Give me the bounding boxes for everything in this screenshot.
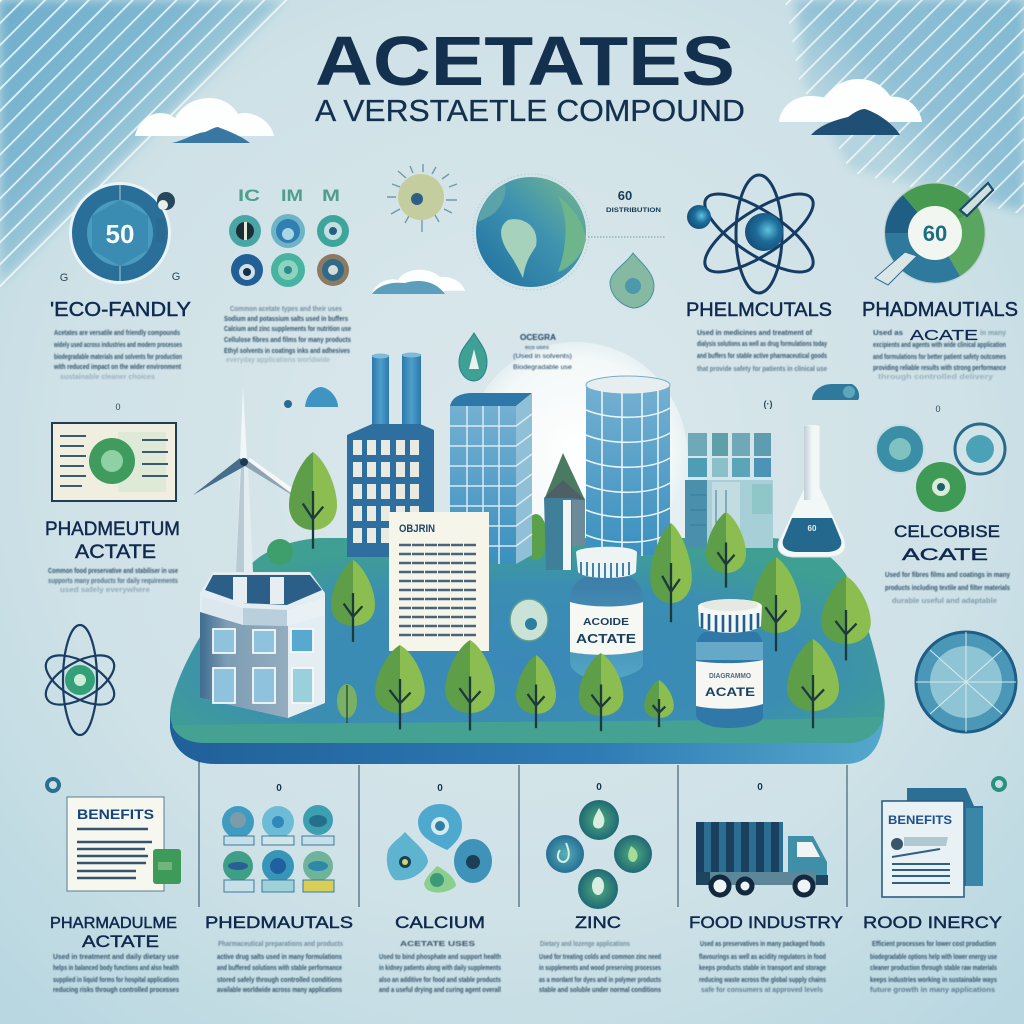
heading: phadmeutum acetate xyxy=(45,519,180,563)
icon: calcium cluster xyxy=(387,804,492,892)
icon: atom xyxy=(687,175,824,293)
small column markers: 0 xyxy=(276,783,282,794)
icon grid heading xyxy=(238,186,340,205)
text block: eco-friendly: widely used across industries and modern processes xyxy=(53,340,182,349)
text block: centre note: Biodegradable use xyxy=(513,364,572,371)
text block: food industry: Used as preservatives in many packaged foods xyxy=(700,939,825,948)
text block: calcium xyxy=(379,939,501,994)
text block: phadmeutum xyxy=(48,566,178,594)
text block: icon grid: Ethyl solvents in coatings inks and adhesives xyxy=(224,346,350,355)
icon: water drop centre xyxy=(459,333,487,381)
small glyphs beside gauge: G xyxy=(172,271,180,283)
text block: icon grid xyxy=(224,304,351,364)
text block: phadmautials: through controlled delivery xyxy=(878,372,994,381)
heading: cellulose acetate: ACATE xyxy=(902,545,988,564)
text block: centre note: eco uses xyxy=(525,345,550,351)
text block: phedmautals: available worldwide across many applications xyxy=(217,985,342,994)
icon grid heading: IM xyxy=(281,186,303,205)
icon: lab flask xyxy=(778,424,845,557)
platform xyxy=(170,538,885,764)
corner stripes top left xyxy=(0,0,292,296)
heading: phelmcutals: PHELMCUTALS xyxy=(686,300,832,321)
text block: zinc: Used for treating colds and common zinc need xyxy=(539,952,661,961)
document sheet: OBJRIN xyxy=(399,523,435,535)
heading: calcium: CALCIUM xyxy=(395,913,485,932)
text block: cellulose: durable useful and adaptable xyxy=(892,596,997,605)
small column markers: 0 xyxy=(437,783,443,794)
title: ACETATES xyxy=(315,22,735,100)
text block: phedmautals xyxy=(217,939,343,994)
icon: report with folder: BENEFITS xyxy=(888,813,952,827)
heading: zinc: ZINC xyxy=(575,913,621,932)
background tile wall xyxy=(685,433,773,548)
icon: sun xyxy=(387,164,457,232)
icon: eco gauge 50: 50 xyxy=(106,219,134,249)
text block: icon grid: Sodium and potassium salts used in buffers xyxy=(224,314,348,323)
text block: calcium: Used to bind phosphate and support health xyxy=(379,952,501,961)
icon: cloud right xyxy=(779,79,922,135)
panel: benefits document xyxy=(67,797,181,891)
heading: cellulose acetate xyxy=(894,522,1000,564)
icon: globe xyxy=(473,174,589,290)
text block: cellulose xyxy=(885,570,1011,605)
bottle: acetate large: ACOIDE xyxy=(583,617,629,628)
chimneys xyxy=(372,352,421,433)
text block: zinc: Dietary and lozenge applications xyxy=(540,939,630,948)
text block: eco-friendly: Acetates are versatile and friendly compounds xyxy=(54,328,180,337)
text block: pharmadulme: reducing risks through controlled processes xyxy=(53,985,179,994)
sub heading: ate: ACATE xyxy=(910,327,978,344)
icon: eco gauge 50 xyxy=(69,182,175,284)
text block: calcium: also an additive for food and stable products xyxy=(379,975,501,984)
text block: phedmautals: active drug salts used in many formulations xyxy=(217,952,342,961)
tree behind factory xyxy=(289,452,337,549)
icon: truck xyxy=(696,822,828,895)
icon: cloud left xyxy=(135,98,274,143)
small glyphs beside gauge: G xyxy=(60,272,68,284)
text block: calcium: in kidney patients along with daily supplements xyxy=(379,963,501,972)
round emblem xyxy=(510,599,548,641)
bottle: acetate small: ACATE xyxy=(705,685,755,699)
text block: eco-friendly: with reduced impact on the wider environment xyxy=(53,362,181,371)
trees front row xyxy=(375,639,839,731)
text block: food industry: reducing waste across the global supply chains xyxy=(699,975,826,984)
text block: zinc: as a mordant for dyes and in polymer products xyxy=(539,975,661,984)
heading: phadmeutum acetate: PHADMEUTUM xyxy=(45,519,180,540)
small column markers: 0 xyxy=(757,782,763,793)
icon: report with folder xyxy=(882,788,983,897)
small column markers: 0 xyxy=(596,782,602,793)
text block: centre note: (Used in solvents) xyxy=(513,353,572,360)
heading: phedmautals: PHEDMAUTALS xyxy=(205,913,353,932)
text block: phelmcutals xyxy=(697,328,828,373)
small gabled house xyxy=(544,453,585,570)
text block: zinc: stable and soluble under normal conditions xyxy=(539,985,661,994)
octagonal building xyxy=(200,572,325,718)
text block: phadmeutum: used safely everywhere xyxy=(60,585,150,594)
panel: phadmeutum card xyxy=(52,423,176,501)
bottle: acetate small: DIAGRAMMO xyxy=(709,673,752,680)
heading: rood inercy: ROOD INERCY xyxy=(863,913,1002,932)
icon grid heading: M xyxy=(322,186,340,205)
small floating icons: 0 xyxy=(935,404,941,414)
icon: wind turbine xyxy=(193,386,305,572)
heading: pharmadulme acetate: ACTATE xyxy=(82,932,159,951)
text block: phedmautals: and buffered solutions with stable performance xyxy=(217,963,342,972)
heading: pharmadulme acetate: PHARMADULME xyxy=(50,915,177,932)
small column markers xyxy=(45,776,1007,794)
heading: food industry: FOOD INDUSTRY xyxy=(689,913,843,932)
trees middle row xyxy=(331,512,871,660)
text block: phadmautials: Used as xyxy=(873,328,903,337)
text block: phelmcutals: Used in medicines and treatment of xyxy=(697,328,812,337)
text block: phelmcutals: that provide safety for patients in clinical use xyxy=(697,364,827,373)
text block: zinc: in supplements and wood preserving processes xyxy=(539,963,661,972)
text block: phadmeutum: supports many products for daily requirements xyxy=(48,576,178,585)
text block: food industry: keeps products stable in transport and storage xyxy=(699,963,826,972)
text block: pharmadulme xyxy=(53,952,179,994)
text: 60 stat: DISTRIBUTION xyxy=(606,208,661,214)
icon: zinc circles xyxy=(546,800,652,909)
small floating icons: 0 xyxy=(115,402,121,412)
text block: food industry: flavourings as well as acidity regulators in food xyxy=(699,952,826,961)
heading: pharmadulme acetate xyxy=(50,915,177,951)
icon: drop xyxy=(610,253,654,308)
text block: eco-friendly: biodegradable materials and solvents for production xyxy=(54,352,182,361)
icon: faint background trees xyxy=(267,514,547,723)
text block: calcium: ACETATE USES xyxy=(400,939,475,948)
icon grid heading: IC xyxy=(238,186,260,205)
bottle: acetate large xyxy=(570,547,643,680)
icon grid: six circles xyxy=(229,214,349,287)
text block: pharmadulme: supplied in liquid forms for hospital applications xyxy=(53,975,179,984)
text block: icon grid: everyday applications worldwide xyxy=(226,355,330,364)
text block: centre note: OCEGRA xyxy=(520,333,556,342)
text block: calcium: and a useful drying and curing agent overall xyxy=(379,985,501,994)
document sheet xyxy=(389,512,489,651)
text block: food industry: safe for consumers at approved levels xyxy=(701,985,823,994)
small floating icons: (·) xyxy=(764,399,772,409)
column dividers xyxy=(199,760,847,907)
text block: eco-friendly xyxy=(53,328,182,381)
text block: phedmautals: Pharmaceutical preparations and products xyxy=(218,939,343,948)
text block: food industry xyxy=(699,939,826,994)
text block: phadmeutum: Common food preservative and stabiliser in use xyxy=(48,566,178,575)
text block: phedmautals: stored safely through controlled conditions xyxy=(217,975,342,984)
heading: phadmeutum acetate: ACTATE xyxy=(75,542,156,563)
soft white glow behind towers xyxy=(470,342,688,560)
icon: three circles right xyxy=(876,424,1005,512)
text block: zinc xyxy=(539,939,661,994)
panel: benefits document: BENEFITS xyxy=(77,806,154,822)
icon grid: six bottles xyxy=(222,805,334,892)
icon: small cloud xyxy=(372,270,465,294)
icon: globe right xyxy=(916,632,1016,732)
corner stripes top right xyxy=(785,0,1024,215)
factory building xyxy=(347,424,434,557)
text: 60 stat xyxy=(606,188,661,214)
text block: pharmadulme: helps in balanced body functions and also health xyxy=(53,963,179,972)
glass office building xyxy=(450,393,532,564)
icon: lab flask: 60 xyxy=(808,524,817,533)
small glyphs beside gauge xyxy=(60,271,180,284)
text block: eco-friendly: sustainable cleaner choices xyxy=(60,372,155,381)
heading: eco-friendly: 'ECO-FANDLY xyxy=(50,299,191,321)
small floating icons xyxy=(115,384,941,414)
icon: pie chart with pencils: 60 xyxy=(923,221,947,246)
icon: atom left xyxy=(38,625,122,735)
heading: phadmautials: PHADMAUTIALS xyxy=(862,299,1018,321)
text block: icon grid: Cellulose fibres and films for many products xyxy=(224,335,351,344)
text block: icon grid: Calcium and zinc supplements for nutrition use xyxy=(224,324,351,333)
dotted connector xyxy=(588,236,665,238)
text: 60 stat: 60 xyxy=(618,188,632,203)
text block: icon grid: Common acetate types and their uses xyxy=(230,304,342,313)
subtitle: A VERSTAETLE COMPOUND xyxy=(315,93,745,128)
heading: cellulose acetate: CELCOBISE xyxy=(894,522,1000,541)
icon: pie chart with pencils xyxy=(875,182,993,285)
text block: pharmadulme: Used in treatment and daily dietary use xyxy=(53,952,179,961)
bottle: acetate small xyxy=(696,599,763,728)
bottle: acetate large: ACTATE xyxy=(576,631,636,646)
text block: phadmautials: in many xyxy=(980,328,1007,337)
text block: centre note xyxy=(513,333,572,371)
text block: phelmcutals: and buffers for stable active pharmaceutical goods xyxy=(697,351,827,360)
text block: rood inercy: future growth in many applications xyxy=(870,985,995,994)
text block: rood inercy xyxy=(870,939,997,994)
cylinder tower xyxy=(586,376,670,556)
text block: phelmcutals: dialysis solutions as well as drug formulations today xyxy=(697,339,828,348)
text block: phadmautials xyxy=(873,328,1007,381)
